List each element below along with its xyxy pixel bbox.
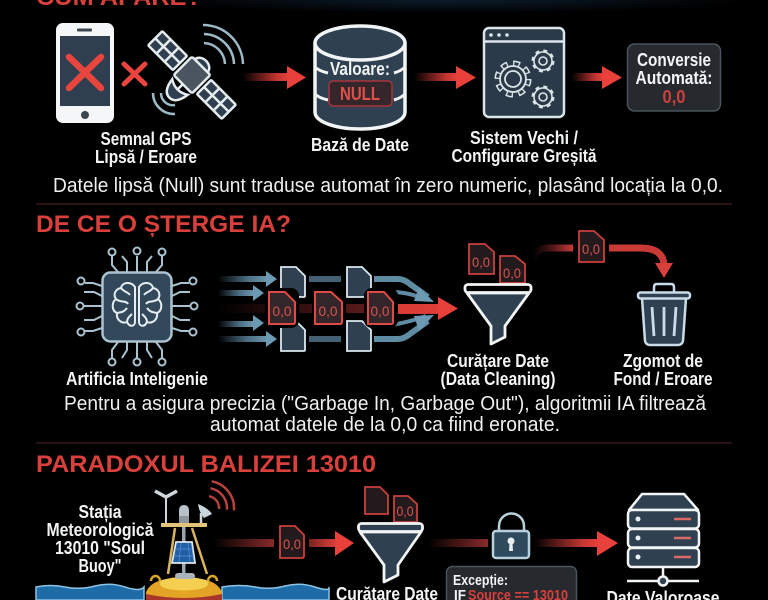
icon: satellite [133, 24, 243, 134]
label: baza de date: Bază de Date [311, 135, 409, 155]
diagram: data stream [218, 267, 443, 351]
diagram: data stream: 0,0 [272, 303, 292, 319]
icon: filter funnel [465, 284, 531, 344]
icon: discarded file: 0,0 [582, 241, 600, 257]
label: semnal gps [95, 129, 197, 167]
illustration: sea [36, 584, 329, 600]
icon: database with null value [315, 26, 405, 129]
icon: trash can [638, 284, 690, 345]
icon: red files above funnel: 0,0 [472, 254, 490, 270]
arrow: stream to filter [398, 297, 458, 320]
label: zgomot de fond: Zgomot de [623, 351, 703, 371]
icon: phone without signal [56, 23, 114, 123]
label: null: NULL [340, 84, 380, 104]
diagram: data stream: 0,0 [318, 303, 338, 319]
panel: exception code [446, 566, 576, 600]
label: valoare: Valoare: [330, 59, 390, 79]
icon: buoy [146, 481, 234, 600]
label: artificia inteligenie: Artificia Inteligenie [66, 369, 208, 389]
text: explanation one: Datele lipsă (Null) sunt traduse automat în zero numeric, plasând locația la 0,0. [53, 175, 723, 197]
label: weather station: 13010 "Soul [55, 538, 145, 558]
label: curatare date: Curățare Date [447, 351, 549, 371]
label: zgomot de fond [614, 351, 712, 389]
arrow: lock to server [534, 531, 618, 556]
icon: padlock [493, 514, 529, 558]
heading: paradoxul balizei: PARADOXUL BALIZEI 13010 [36, 451, 376, 478]
icon: red files above funnel [469, 244, 525, 283]
icon: files above second funnel [365, 487, 417, 522]
icon: second filter funnel [358, 524, 422, 582]
text: explanation two: automat datele de la 0,0 ca fiind eronate. [210, 414, 560, 436]
label: curatare date [440, 351, 556, 389]
label: sistem vechi [452, 128, 597, 166]
label: weather station: Buoy" [78, 556, 122, 576]
text: explanation two [64, 393, 707, 436]
panel: automatic conversion: Automată: [636, 68, 712, 88]
icon: buoy data file [280, 526, 304, 558]
arrow: phone to database [243, 66, 306, 89]
label: semnal gps: Semnal GPS [100, 129, 192, 149]
label: weather station: Meteorologică [46, 520, 154, 540]
panel: automatic conversion: Conversie [637, 50, 711, 70]
arrow: database to system [414, 66, 476, 89]
label: weather station [46, 502, 154, 576]
text: explanation two: Pentru a asigura precizia ("Garbage In, Garbage Out"), algoritmii IA filtrează [64, 393, 707, 415]
panel: exception code: Excepție: [453, 572, 508, 589]
icon: files above second funnel: 0,0 [396, 503, 414, 519]
icon: server stack [627, 494, 699, 586]
icon: legacy system window [484, 28, 564, 117]
diagram: data stream: 0,0 [370, 303, 390, 319]
heading: de ce o sterge ia: DE CE O ȘTERGE IA? [36, 211, 291, 238]
panel: automatic conversion: 0,0 [662, 87, 686, 107]
panel: automatic conversion [628, 44, 720, 111]
arrow: filter to lock [428, 539, 488, 547]
arrow: filter to trash [533, 248, 673, 278]
icon: discarded file [579, 231, 604, 262]
arrow: file to filter [309, 531, 354, 556]
label: curatare date: (Data Cleaning) [440, 369, 556, 389]
label: sistem vechi: Sistem Vechi / [470, 128, 578, 148]
label: sistem vechi: Configurare Greșită [452, 146, 597, 166]
label: weather station: Stația [78, 502, 122, 522]
label: semnal gps: Lipsă / Eroare [95, 147, 197, 167]
arrow: buoy to file [213, 539, 274, 547]
label: zgomot de fond: Fond / Eroare [614, 369, 712, 389]
arrow: system to conversion [572, 66, 622, 89]
icon: red files above funnel: 0,0 [503, 265, 521, 281]
icon: small red x [124, 64, 145, 84]
icon: ai chip with brain [76, 248, 198, 366]
icon: buoy data file: 0,0 [283, 536, 301, 552]
